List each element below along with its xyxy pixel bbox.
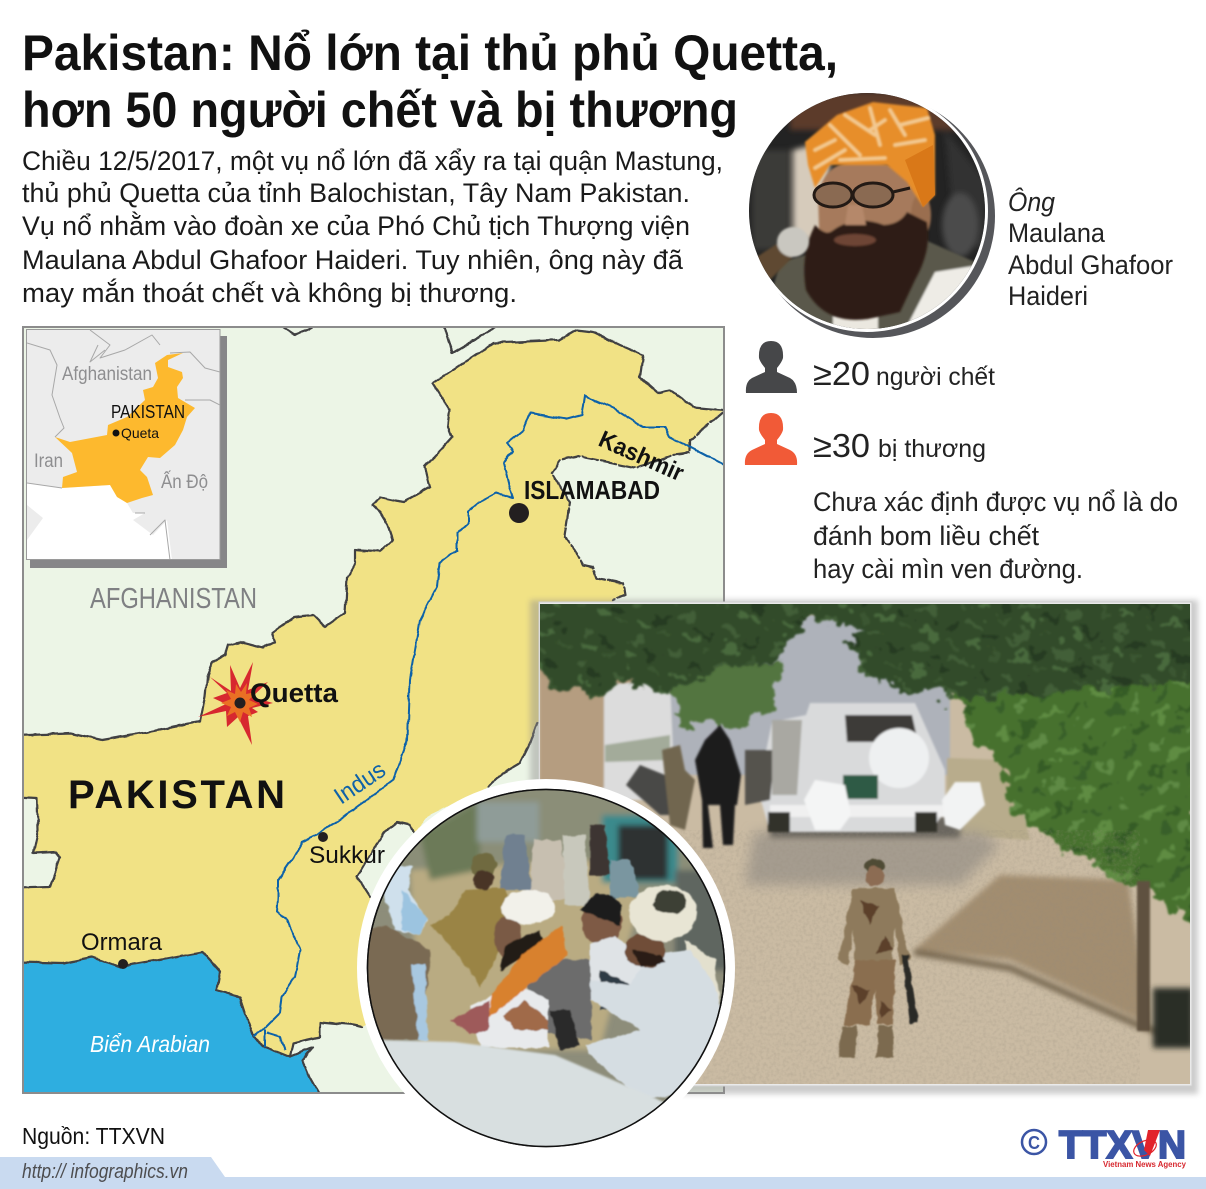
inset labels: Afghanistan <box>62 364 152 385</box>
yellow robed man <box>471 853 497 877</box>
inset labels: Ấn Độ <box>161 471 208 493</box>
title: hơn 50 người chết và bị thương <box>22 82 738 138</box>
damaged car <box>745 703 985 832</box>
note text: hay cài mìn ven đường. <box>813 554 1083 584</box>
note text: đánh bom liều chết <box>813 521 1039 551</box>
figures near car <box>626 725 741 848</box>
portrait caption: Haideri <box>1008 281 1088 311</box>
source credit: Nguồn: TTXVN <box>22 1123 165 1149</box>
dry grass behind car <box>947 758 1030 840</box>
map labels: ISLAMABAD <box>524 475 660 505</box>
stat: deaths <box>813 355 995 392</box>
inset neighbours <box>27 330 220 560</box>
right white robed man's shawl <box>684 940 721 1004</box>
stat: injured <box>813 427 986 464</box>
portrait photo <box>745 90 995 345</box>
intro text: Chiều 12/5/2017, một vụ nổ lớn đã xẩy ra tại quận Mastung, <box>22 146 723 176</box>
inset labels: Queta <box>121 425 159 441</box>
logo: TTXVN: C <box>1028 1133 1040 1153</box>
glasses <box>814 183 910 207</box>
intro text: Maulana Abdul Ghafoor Haideri. Tuy nhiên, ông này đã <box>22 245 684 275</box>
inset locator map <box>26 330 227 568</box>
white caps and turban <box>501 890 555 924</box>
portrait caption: Ông <box>1008 186 1055 217</box>
vest and shirt <box>774 240 974 329</box>
footer bar <box>0 1157 1206 1189</box>
road debris <box>745 832 1000 885</box>
embankment <box>914 875 1150 1025</box>
note text: Chưa xác định được vụ nổ là do <box>813 487 1178 517</box>
canopy left <box>530 594 815 695</box>
borders <box>15 320 730 1100</box>
map labels: Sukkur <box>309 842 385 869</box>
soldier <box>838 859 918 1058</box>
inset sea <box>27 483 172 560</box>
sea <box>24 953 318 1092</box>
right tree <box>952 678 1190 924</box>
portrait caption <box>1008 186 1173 311</box>
inset labels <box>34 364 208 493</box>
portrait caption: Maulana <box>1008 218 1106 248</box>
logo: TTXVN: Vietnam News Agency <box>1103 1159 1186 1169</box>
icon: explosion at Quetta <box>198 662 339 745</box>
note text <box>813 487 1178 584</box>
river: Indus <box>253 396 730 1050</box>
map labels: Biển Arabian <box>90 1031 210 1057</box>
icon: injured person <box>745 413 797 465</box>
inset Pakistan <box>55 353 195 503</box>
icon: explosion at Quetta: Quetta <box>250 678 339 708</box>
footer bar: http:// infographics.vn <box>22 1161 188 1183</box>
map labels: Indus <box>329 756 391 810</box>
microphone <box>755 227 809 282</box>
mid green tree <box>674 660 785 728</box>
stat: injured: ≥30 <box>813 427 870 464</box>
stat: deaths: người chết <box>876 363 995 391</box>
middle man <box>580 912 624 943</box>
mud walls <box>540 669 633 684</box>
map labels: Ormara <box>81 929 163 956</box>
pakistan territory <box>15 330 723 1057</box>
icon: dead person <box>746 341 797 393</box>
tree trunk and bush <box>1137 881 1150 1031</box>
central man <box>525 958 592 1040</box>
photo: crowd in round frame <box>357 779 735 1160</box>
background crowd <box>500 835 532 890</box>
stat: injured: bị thương <box>878 435 986 463</box>
white car hood <box>380 1040 690 1160</box>
turban <box>805 102 935 207</box>
intro text: thủ phủ Quetta của tỉnh Balochistan, Tây Nam Pakistan. <box>22 178 690 208</box>
logo: TTXVN: TTXVN <box>1059 1124 1186 1167</box>
title <box>22 25 838 138</box>
map labels: PAKISTAN <box>68 773 285 817</box>
map labels: AFGHANISTAN <box>90 583 257 615</box>
face and beard <box>804 162 931 320</box>
intro text: may mắn thoát chết và không bị thương. <box>22 277 517 308</box>
woman-like figure in blue and white <box>383 866 428 935</box>
portrait caption: Abdul Ghafoor <box>1008 250 1173 280</box>
right man body <box>585 950 722 1100</box>
sky <box>670 615 950 775</box>
map labels: Kashmir <box>595 426 688 487</box>
brown robed man <box>368 925 430 1040</box>
intro text <box>22 146 723 308</box>
sand grain <box>687 830 1140 1084</box>
inset labels: PAKISTAN <box>111 402 185 422</box>
intro text: Vụ nổ nhằm vào đoàn xe của Phó Chủ tịch Thượng viện <box>22 210 690 241</box>
stat: deaths: ≥20 <box>813 355 870 392</box>
panel: main map <box>15 320 730 1100</box>
photo: damaged car scene <box>530 594 1200 1094</box>
canopy centre <box>800 594 1200 700</box>
title: Pakistan: Nổ lớn tại thủ phủ Quetta, <box>22 25 838 81</box>
map labels <box>68 426 688 1057</box>
inset labels: Iran <box>34 451 63 472</box>
